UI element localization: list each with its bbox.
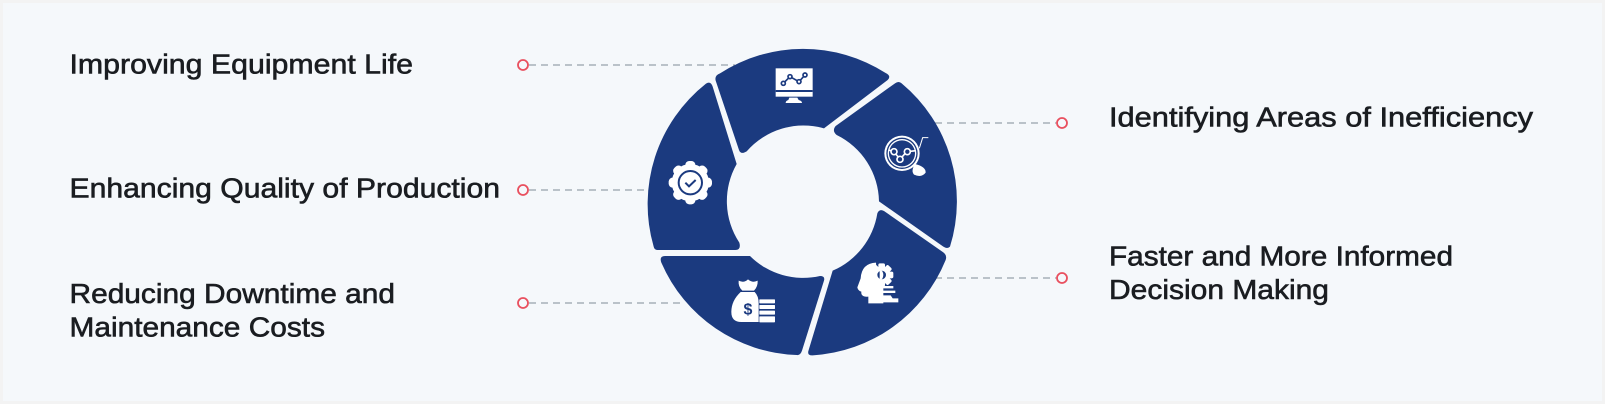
label: Reducing Downtime and Maintenance Costs: Reducing Downtime and (70, 278, 395, 309)
icon: magnifier bulb (884, 136, 928, 176)
icon: head with gear and circuits (857, 263, 898, 303)
label: Identifying Areas of Inefficiency: Identifying Areas of Inefficiency (1109, 102, 1533, 132)
icon: money bag and coins: $ (744, 301, 753, 318)
label: Improving Equipment Life: Improving Equipment Life (70, 48, 413, 80)
segment: left (648, 83, 740, 250)
icon: monitor chart (776, 68, 813, 103)
segment: right (834, 82, 957, 248)
connector: Improving Equipment Life (518, 60, 735, 70)
connector: Faster and More Informed Decision Making (935, 273, 1067, 283)
label: Enhancing Quality of Production: Enhancing Quality of Production (70, 172, 500, 204)
label: Faster and More Informed Decision Making: Decision Making (1109, 274, 1329, 305)
label: Reducing Downtime and Maintenance Costs: Maintenance Costs (70, 312, 325, 342)
label: Faster and More Informed Decision Making: Faster and More Informed (1109, 240, 1453, 272)
segment: bottom left (661, 256, 824, 355)
connector: Reducing Downtime and Maintenance Costs (518, 298, 680, 308)
connector: Identifying Areas of Inefficiency (935, 118, 1067, 128)
label: Reducing Downtime and Maintenance Costs (70, 278, 395, 342)
segment: top (715, 49, 889, 153)
connector: Enhancing Quality of Production (518, 185, 650, 195)
icon: money bag and coins (731, 279, 775, 322)
label: Faster and More Informed Decision Making (1109, 240, 1453, 305)
icon: gear with check (669, 161, 712, 204)
segment: bottom right (808, 210, 946, 355)
donut chart (648, 49, 957, 355)
